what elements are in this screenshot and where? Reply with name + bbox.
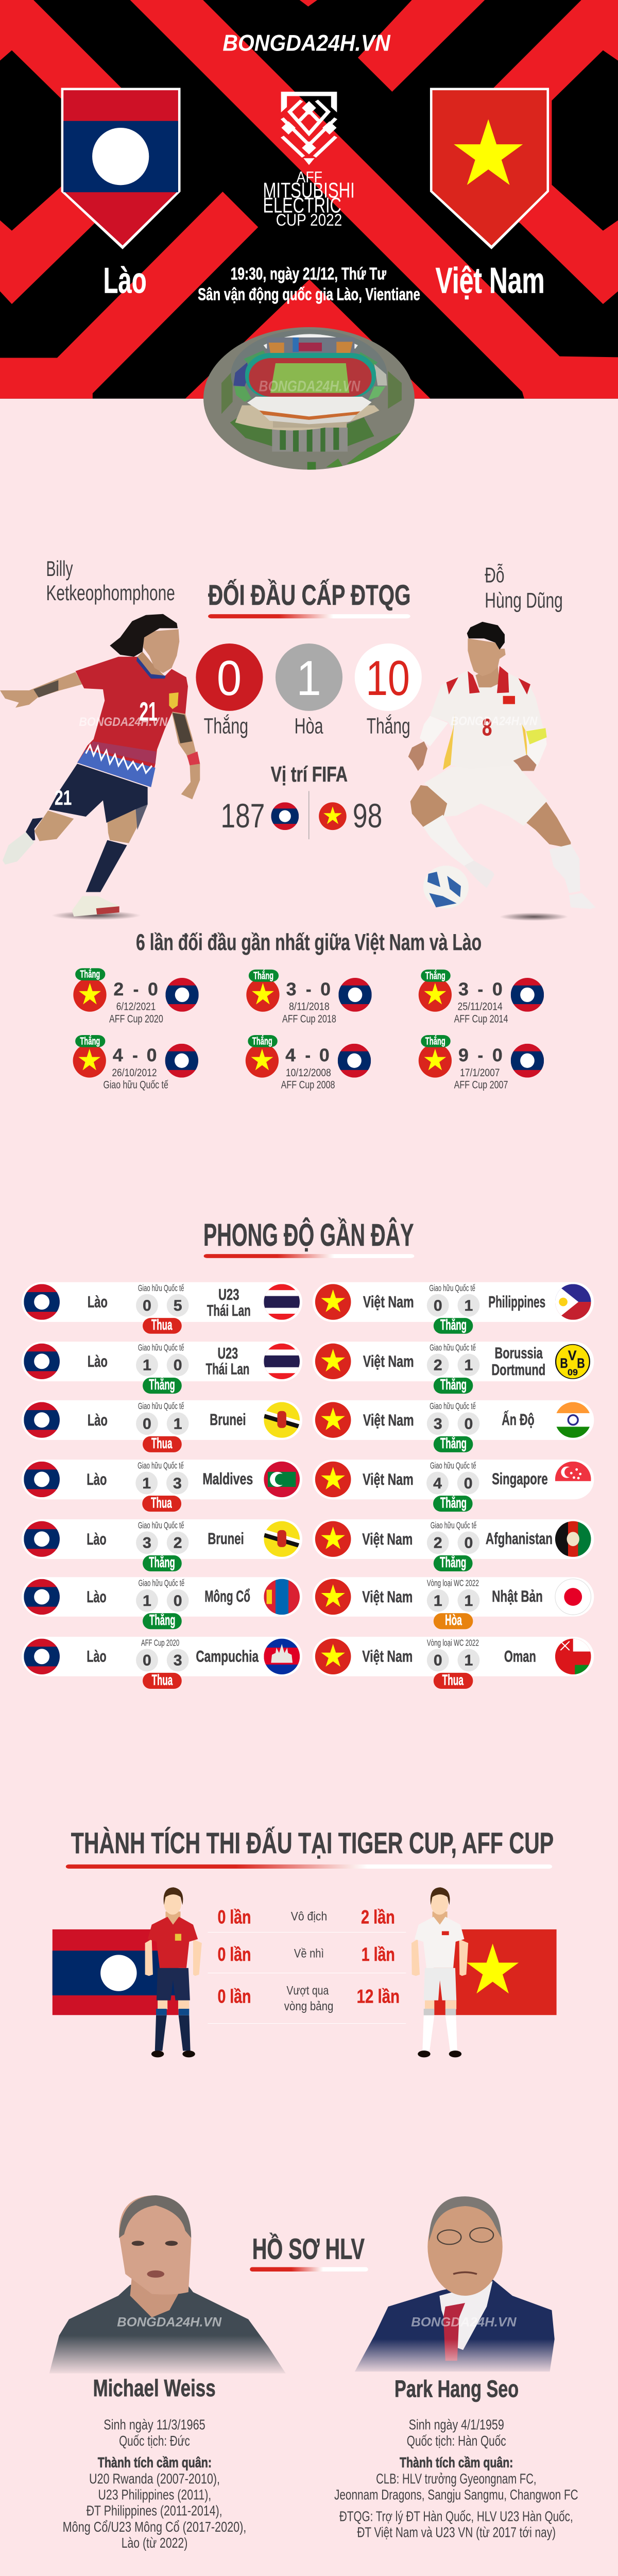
form card: Lào vs Brunei 0-1: Brunei: [210, 1410, 246, 1429]
stat: Lào wins: [196, 643, 263, 738]
stat: Lào wins: Thắng: [204, 713, 248, 738]
player photo: Đỗ Hùng Dũng: 8: [482, 714, 492, 741]
stat: draws: 1: [297, 650, 321, 705]
form card: Lào vs Maldives 1-3: 3: [173, 1475, 182, 1492]
photo: Park Hang Seo: [347, 2196, 560, 2375]
form card: Lào vs Brunei 0-1: 0: [143, 1415, 151, 1432]
stat: Việt Nam wins: 10: [366, 650, 410, 705]
form card: Việt Nam vs Borussia Dortmund 2-1: Việt Nam: [363, 1352, 414, 1370]
heading: Hồ sơ HLV: HỒ SƠ HLV: [252, 2232, 365, 2265]
form card: Việt Nam vs Philippines 0-1: Thắng: [440, 1316, 467, 1333]
icon: Laos shield: [61, 88, 181, 249]
form card: Việt Nam vs Singapore 4-0: Singapore: [492, 1469, 548, 1488]
form card: Lào vs Maldives 1-3: Lào: [87, 1470, 107, 1488]
form card: Việt Nam vs Philippines 0-1: [313, 1280, 594, 1334]
form card: Việt Nam vs Borussia Dortmund 2-1: 09: [568, 1367, 578, 1377]
match 3-0 2014: [419, 970, 544, 1025]
stat: Việt Nam wins: Thắng: [367, 713, 410, 738]
form card: Việt Nam vs Singapore 4-0: Thắng: [440, 1494, 467, 1511]
heading: Hồ sơ HLV: [250, 2232, 368, 2272]
logo: AFF Mitsubishi Electric Cup 2022: ELECTRIC: [263, 194, 341, 217]
form card: Lào vs U23 Thái Lan 1-0: Lào: [88, 1352, 108, 1370]
icon: Vietnam shield: [430, 88, 549, 249]
table row: Về nhì: [208, 1944, 406, 1973]
match 2-0 2021: AFF Cup 2020: [109, 1013, 163, 1025]
match 2-0 2021: Thắng: [80, 968, 100, 980]
flag: Laos: [53, 1929, 179, 2015]
player photo: Billy Ketkeophomphone: 21: [140, 697, 158, 726]
form card: Lào vs Brunei 0-1: 1: [174, 1415, 182, 1432]
match 4-0 2008: 4: [285, 1045, 296, 1065]
match 4-0 2012: Thắng: [80, 1035, 100, 1047]
form card: Lào vs Maldives 1-3: [22, 1460, 302, 1512]
form card: Lào vs Brunei 3-2: 2: [174, 1534, 182, 1551]
form card: Việt Nam vs Singapore 4-0: [313, 1460, 594, 1512]
match 4-0 2012: [73, 1035, 198, 1091]
form card: Việt Nam vs Afghanistan 2-0: Việt Nam: [362, 1530, 413, 1548]
form card: Lào vs Brunei 3-2: Giao hữu Quốc tế: [138, 1520, 184, 1530]
form card: Việt Nam vs Oman 0-1: Oman: [504, 1647, 536, 1666]
match 3-0 2018: [246, 970, 372, 1025]
panel: header: [0, 0, 618, 399]
form card: Việt Nam vs Philippines 0-1: Philippines: [488, 1293, 545, 1311]
match 3-0 2018: -: [306, 979, 312, 999]
coach bio: Park Hang Seo: Sinh ngày 4/1/1959: [409, 2417, 504, 2433]
heading: Đối đầu cấp ĐTQG: [208, 579, 410, 618]
form card: Việt Nam vs Borussia Dortmund 2-1: 2: [434, 1357, 442, 1374]
stat: draws: [276, 643, 342, 738]
FIFA ranking: 187: [221, 797, 265, 835]
team name: Lào: Lào: [104, 260, 147, 301]
form card: Lào vs Brunei 3-2: Brunei: [208, 1529, 244, 1548]
form card: Lào vs Campuchia 0-3: Thua: [152, 1672, 173, 1688]
form card: Lào vs Mông Cổ 1-0: Giao hữu Quốc tế: [139, 1578, 184, 1588]
match 4-0 2008: AFF Cup 2008: [281, 1079, 335, 1091]
match 4-0 2008: 0: [319, 1045, 330, 1065]
form card: Việt Nam vs Borussia Dortmund 2-1: 1: [465, 1357, 473, 1374]
panel: Tiger Cup and AFF Cup record: [53, 1826, 557, 2057]
form card: Lào vs Brunei 0-1: [22, 1400, 302, 1452]
heading: Phong độ gần đây: [203, 1217, 414, 1258]
table row: Vượt qua vòng bảng: 12 lần: [357, 1986, 400, 2007]
coach bio: Michael Weiss: U23 Philippines (2011),: [98, 2487, 211, 2503]
figure: Laos player: [145, 1887, 202, 2057]
form card: Lào vs U23 Thái Lan 0-5: 5: [174, 1297, 182, 1314]
form card: Việt Nam vs Ấn Độ 3-0: Ấn Độ: [502, 1410, 535, 1429]
form card: Việt Nam vs Afghanistan 2-0: Thắng: [440, 1553, 466, 1570]
form card: Việt Nam vs Borussia Dortmund 2-1: Dortmund: [491, 1361, 545, 1379]
coach bio: Michael Weiss: U20 Rwanda (2007-2010),: [89, 2471, 220, 2487]
form card: Việt Nam vs Ấn Độ 3-0: Giao hữu Quốc tế: [430, 1401, 476, 1411]
form card: Lào vs Brunei 0-1: Thua: [151, 1435, 173, 1451]
form card: Việt Nam vs Nhật Bản 1-1: 1: [465, 1592, 473, 1609]
coach bio: Michael Weiss: Sinh ngày 11/3/1965: [104, 2417, 205, 2433]
form card: Lào vs Mông Cổ 1-0: [22, 1577, 302, 1629]
form card: Lào vs Maldives 1-3: Maldives: [202, 1469, 253, 1488]
form card: Lào vs U23 Thái Lan 1-0: 0: [174, 1357, 182, 1374]
panel: last six meetings: [73, 929, 544, 1091]
form card: Việt Nam vs Ấn Độ 3-0: Thắng: [440, 1435, 467, 1451]
form card: Lào vs Maldives 1-3: 1: [142, 1475, 151, 1492]
stadium photo: [202, 326, 417, 470]
form card: Việt Nam vs Borussia Dortmund 2-1: B: [577, 1356, 585, 1371]
player photo: Đỗ Hùng Dũng: [408, 622, 596, 921]
form card: Lào vs Campuchia 0-3: Lào: [87, 1647, 107, 1666]
header background pattern: [0, 0, 618, 399]
coach bio: Park Hang Seo: Thành tích cầm quân:: [400, 2454, 513, 2471]
logo: Bongda24h.vn: BONGDA24H.VN: [222, 30, 390, 56]
table row: Về nhì: 1 lần: [362, 1944, 395, 1965]
form card: Lào vs U23 Thái Lan 0-5: Thua: [151, 1316, 173, 1333]
player name: Đỗ Hùng Dũng: [485, 564, 563, 613]
match 9-0 2007: AFF Cup 2007: [454, 1079, 508, 1091]
heading: Đối đầu cấp ĐTQG: ĐỐI ĐẦU CẤP ĐTQG: [208, 579, 410, 611]
player photo: Billy Ketkeophomphone: [0, 614, 200, 920]
player name: Billy Ketkeophomphone: Billy: [46, 557, 73, 581]
logo: AFF Mitsubishi Electric Cup 2022: [263, 92, 355, 230]
form card: Lào vs U23 Thái Lan 0-5: 0: [143, 1297, 151, 1314]
form card: Việt Nam vs Borussia Dortmund 2-1: B: [560, 1356, 568, 1371]
form card: Lào vs U23 Thái Lan 1-0: Thái Lan: [205, 1361, 249, 1378]
form card: Lào vs U23 Thái Lan 0-5: Thái Lan: [207, 1302, 251, 1319]
match 4-0 2012: 4: [113, 1045, 123, 1065]
coach bio: Michael Weiss: Michael Weiss: [93, 2375, 216, 2402]
icon: football: [423, 866, 469, 908]
form card: Lào vs Maldives 1-3: Thua: [151, 1495, 172, 1511]
form card: Việt Nam vs Singapore 4-0: Việt Nam: [363, 1470, 414, 1488]
match 9-0 2007: Thắng: [425, 1035, 445, 1047]
form card: Lào vs Mông Cổ 1-0: Mông Cổ: [204, 1587, 250, 1605]
form card: Lào vs U23 Thái Lan 1-0: [22, 1342, 302, 1394]
player photo: Billy Ketkeophomphone: BONGDA24H.VN: [79, 715, 168, 729]
form card: Việt Nam vs Afghanistan 2-0: 2: [434, 1534, 442, 1551]
match 3-0 2018: AFF Cup 2018: [282, 1013, 336, 1025]
match 4-0 2008: -: [305, 1045, 311, 1065]
figure: Vietnam player: [411, 1887, 468, 2057]
form card: Lào vs Brunei 0-1: Lào: [88, 1411, 108, 1429]
form card: Lào vs Campuchia 0-3: Campuchia: [196, 1647, 259, 1666]
table row: Vượt qua vòng bảng: vòng bảng: [284, 1999, 333, 2013]
logo: AFF Mitsubishi Electric Cup 2022: CUP 2022: [276, 211, 342, 230]
match 4-0 2012: Giao hữu Quốc tế: [104, 1079, 168, 1091]
form card: Lào vs Mông Cổ 1-0: Lào: [87, 1587, 107, 1606]
match 9-0 2007: -: [478, 1045, 483, 1065]
form card: Lào vs Brunei 3-2: 3: [143, 1534, 151, 1551]
table row: Vượt qua vòng bảng: 0 lần: [217, 1986, 251, 2007]
form card: Việt Nam vs Borussia Dortmund 2-1: V: [568, 1348, 577, 1363]
match 2-0 2021: 2: [113, 979, 124, 999]
photo: Michael Weiss: BONGDA24H.VN: [117, 2315, 222, 2329]
FIFA ranking: [221, 763, 382, 839]
logo: AFF Mitsubishi Electric Cup 2022: MITSUBISHI: [263, 179, 355, 202]
stadium photo: BONGDA24H.VN: [259, 378, 360, 395]
match 2-0 2021: [73, 968, 199, 1025]
form card: Việt Nam vs Oman 0-1: [313, 1637, 594, 1689]
form card: Việt Nam vs Borussia Dortmund 2-1: Giao hữu Quốc tế: [430, 1343, 476, 1352]
match date and venue: [198, 264, 420, 304]
match 3-0 2014: 25/11/2014: [458, 1001, 503, 1013]
form card: Lào vs U23 Thái Lan 1-0: U23: [217, 1345, 238, 1362]
form card: Lào vs Campuchia 0-3: [22, 1637, 302, 1689]
form card: Việt Nam vs Nhật Bản 1-1: [313, 1577, 594, 1629]
FIFA ranking: 98: [353, 797, 382, 835]
coach bio: Michael Weiss: Mông Cổ/U23 Mông Cổ (2017-2020),: [63, 2519, 246, 2535]
form card: Việt Nam vs Ấn Độ 3-0: [313, 1400, 594, 1452]
coach bio: Michael Weiss: Lào (từ 2022): [122, 2535, 187, 2551]
form card: Việt Nam vs Nhật Bản 1-1: Việt Nam: [362, 1587, 413, 1606]
table row: Vượt qua vòng bảng: [208, 1983, 406, 2024]
form card: Việt Nam vs Afghanistan 2-0: [313, 1519, 594, 1571]
match date and venue: Sân vận động quốc gia Lào, Vientiane: [198, 285, 420, 304]
form card: Việt Nam vs Philippines 0-1: 1: [465, 1297, 473, 1314]
form card: Việt Nam vs Nhật Bản 1-1: 1: [434, 1592, 442, 1609]
coach bio: Park Hang Seo: Park Hang Seo: [394, 2376, 519, 2402]
stat: Lào wins: 0: [217, 650, 242, 705]
match 3-0 2014: AFF Cup 2014: [454, 1013, 508, 1025]
match date and venue: 19:30, ngày 21/12, Thứ Tư: [231, 264, 386, 283]
form card: Việt Nam vs Singapore 4-0: 0: [464, 1475, 473, 1492]
photo: Michael Weiss: [40, 2195, 291, 2376]
match 3-0 2014: 0: [492, 979, 503, 999]
form card: Lào vs Campuchia 0-3: 0: [143, 1652, 151, 1669]
panel: coach profiles: [40, 2195, 578, 2551]
stat: draws: Hòa: [295, 713, 323, 738]
match 2-0 2021: 0: [148, 979, 158, 999]
form card: Việt Nam vs Borussia Dortmund 2-1: Thắng: [440, 1376, 467, 1393]
form card: Lào vs U23 Thái Lan 1-0: Giao hữu Quốc tế: [138, 1343, 184, 1352]
form card: Lào vs Mông Cổ 1-0: 0: [174, 1592, 182, 1609]
form card: Lào vs U23 Thái Lan 1-0: 1: [143, 1357, 151, 1374]
form card: Việt Nam vs Philippines 0-1: Giao hữu Quốc tế: [429, 1283, 475, 1293]
form card: Việt Nam vs Philippines 0-1: Việt Nam: [363, 1293, 414, 1311]
table row: Vô địch: Vô địch: [291, 1909, 327, 1923]
form card: Việt Nam vs Oman 0-1: Thua: [442, 1672, 464, 1688]
form card: Lào vs Brunei 0-1: Giao hữu Quốc tế: [138, 1401, 184, 1411]
panel: recent form: [22, 1217, 594, 1689]
player name: Đỗ Hùng Dũng: Đỗ: [485, 564, 505, 587]
match 3-0 2018: 8/11/2018: [289, 1001, 330, 1013]
player name: Billy Ketkeophomphone: Ketkeophomphone: [46, 582, 175, 605]
form card: Việt Nam vs Afghanistan 2-0: Giao hữu Quốc tế: [431, 1520, 476, 1530]
form card: Việt Nam vs Philippines 0-1: 0: [434, 1297, 442, 1314]
table row: Vô địch: [208, 1907, 406, 1933]
coach bio: Michael Weiss: Quốc tịch: Đức: [119, 2433, 190, 2449]
form card: Lào vs Campuchia 0-3: AFF Cup 2020: [141, 1638, 179, 1648]
stat: Việt Nam wins: [355, 643, 422, 738]
form card: Việt Nam vs Nhật Bản 1-1: Hòa: [445, 1612, 462, 1628]
table row: Vô địch: 0 lần: [217, 1907, 251, 1928]
form card: Lào vs Mông Cổ 1-0: Thắng: [149, 1611, 176, 1628]
match 2-0 2021: -: [133, 979, 139, 999]
form card: Lào vs U23 Thái Lan 0-5: Giao hữu Quốc tế: [138, 1283, 184, 1293]
form card: Lào vs U23 Thái Lan 1-0: Thắng: [149, 1376, 175, 1393]
FIFA ranking: Vị trí FIFA: [271, 763, 348, 786]
form card: Việt Nam vs Singapore 4-0: 4: [433, 1475, 442, 1492]
form card: Lào vs Mông Cổ 1-0: 1: [143, 1592, 151, 1609]
player photo: Billy Ketkeophomphone: 21: [55, 787, 72, 809]
match 9-0 2007: 0: [492, 1045, 503, 1065]
form card: Việt Nam vs Oman 0-1: Vòng loại WC 2022: [427, 1638, 479, 1648]
match 3-0 2014: Thắng: [425, 970, 445, 981]
match 4-0 2012: 0: [147, 1045, 157, 1065]
form card: Việt Nam vs Nhật Bản 1-1: Vòng loại WC 2022: [427, 1578, 479, 1588]
match 4-0 2012: -: [132, 1045, 138, 1065]
match 3-0 2018: 3: [286, 979, 297, 999]
player photo: Đỗ Hùng Dũng: BONGDA24H.VN: [451, 714, 538, 728]
match 4-0 2012: 26/10/2012: [112, 1067, 157, 1079]
player name: Billy Ketkeophomphone: [46, 557, 175, 605]
match 3-0 2014: -: [478, 979, 483, 999]
form card: Lào vs U23 Thái Lan 0-5: [22, 1282, 302, 1334]
form card: Việt Nam vs Nhật Bản 1-1: Nhật Bản: [492, 1587, 543, 1605]
form card: Việt Nam vs Borussia Dortmund 2-1: [313, 1342, 594, 1394]
form card: Việt Nam vs Ấn Độ 3-0: 3: [434, 1415, 442, 1432]
table row: Về nhì: Về nhì: [294, 1946, 324, 1960]
form card: Lào vs U23 Thái Lan 0-5: Lào: [88, 1293, 108, 1311]
table row: Vô địch: 2 lần: [361, 1907, 395, 1928]
form card: Việt Nam vs Borussia Dortmund 2-1: Borussia: [494, 1345, 543, 1362]
match 9-0 2007: 9: [458, 1045, 469, 1065]
form card: Lào vs Maldives 1-3: Giao hữu Quốc tế: [138, 1461, 184, 1470]
form card: Việt Nam vs Oman 0-1: 0: [434, 1652, 442, 1669]
photo: Park Hang Seo: BONGDA24H.VN: [411, 2315, 517, 2329]
match 3-0 2018: 0: [320, 979, 331, 999]
coach bio: Park Hang Seo: CLB: HLV trưởng Gyeongnam FC,: [376, 2471, 537, 2487]
form card: Lào vs Brunei 3-2: Lào: [87, 1530, 107, 1548]
form card: Việt Nam vs Afghanistan 2-0: 0: [465, 1534, 473, 1551]
coach bio: Park Hang Seo: Quốc tịch: Hàn Quốc: [407, 2433, 506, 2449]
table row: Vượt qua vòng bảng: Vượt qua: [286, 1983, 329, 1997]
form card: Việt Nam vs Oman 0-1: Việt Nam: [362, 1647, 413, 1666]
table row: Về nhì: 0 lần: [217, 1944, 251, 1965]
form card: Lào vs Brunei 3-2: Thắng: [149, 1553, 175, 1570]
coach bio: Park Hang Seo: [334, 2376, 578, 2540]
coach bio: Michael Weiss: ĐT Philippines (2011-2014),: [87, 2503, 222, 2519]
form card: Lào vs U23 Thái Lan 0-5: U23: [218, 1286, 239, 1303]
logo: AFF Mitsubishi Electric Cup 2022: AFF: [297, 168, 322, 186]
match 4-0 2008: Thắng: [252, 1035, 272, 1047]
match 9-0 2007: [419, 1035, 544, 1091]
form card: Việt Nam vs Oman 0-1: 1: [465, 1652, 473, 1669]
match 3-0 2018: Thắng: [253, 970, 273, 981]
match 9-0 2007: 17/1/2007: [460, 1067, 500, 1079]
match 4-0 2008: [246, 1035, 371, 1091]
match 2-0 2021: 6/12/2021: [116, 1001, 156, 1013]
coach bio: Michael Weiss: [63, 2375, 246, 2551]
coach bio: Michael Weiss: Thành tích cầm quân:: [98, 2454, 212, 2471]
form card: Việt Nam vs Singapore 4-0: Giao hữu Quốc tế: [430, 1461, 476, 1470]
form card: Lào vs Brunei 3-2: [22, 1519, 302, 1571]
match 4-0 2008: 10/12/2008: [286, 1067, 331, 1079]
form card: Việt Nam vs Ấn Độ 3-0: 0: [465, 1415, 473, 1432]
form card: Lào vs Campuchia 0-3: 3: [174, 1652, 182, 1669]
flag: Vietnam: [434, 1929, 557, 2015]
match 3-0 2014: 3: [458, 979, 469, 999]
form card: Việt Nam vs Ấn Độ 3-0: Việt Nam: [363, 1411, 414, 1429]
panel: head-to-head: [46, 557, 563, 839]
